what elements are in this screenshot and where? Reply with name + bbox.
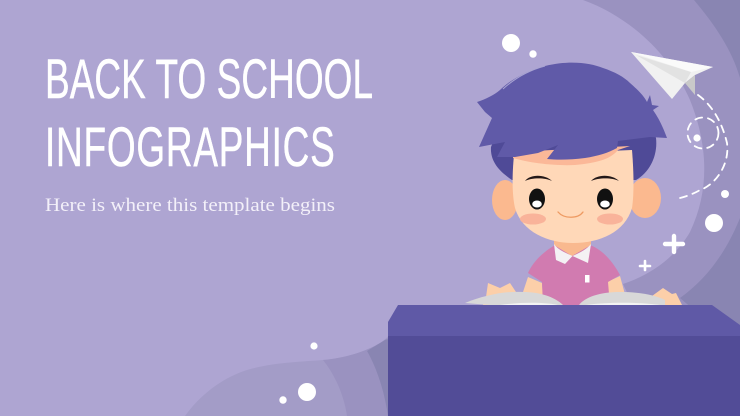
- title line 1: BACK TO SCHOOL: [45, 48, 373, 111]
- open book: [465, 292, 665, 305]
- forehead shadow: [513, 146, 630, 165]
- hair front: [477, 63, 667, 160]
- shirt: [528, 245, 620, 306]
- icon: paper plane: [631, 52, 713, 99]
- character: boy: [477, 63, 667, 306]
- top right darker band: [680, 0, 740, 345]
- eyebrows: [525, 176, 619, 181]
- cheeks: [520, 214, 623, 224]
- mouth: [558, 212, 583, 217]
- decorative dots: [279, 34, 729, 404]
- bottom darker band: [367, 330, 420, 416]
- desk front: [388, 336, 740, 416]
- collar: [554, 244, 591, 264]
- subtitle: Here is where this template begins: [45, 195, 335, 216]
- plane dashed trail: [680, 95, 727, 198]
- arms: [521, 276, 626, 298]
- eye right: [597, 188, 613, 210]
- title line 2: INFOGRAPHICS: [45, 116, 335, 179]
- neck: [554, 240, 591, 256]
- top right curved band: [583, 0, 740, 340]
- title: [45, 48, 373, 179]
- shirt pocket tag: [585, 275, 590, 282]
- hands: [483, 283, 682, 305]
- ears: [492, 178, 661, 220]
- bottom left wave band: [185, 316, 430, 416]
- face: [513, 150, 634, 243]
- bottom middle band: [323, 330, 400, 416]
- desk: [388, 305, 740, 416]
- icon: plus signs: [640, 236, 683, 270]
- desk top face: [388, 305, 740, 337]
- hair highlight: [503, 66, 545, 89]
- hair back: [491, 100, 656, 180]
- eye left: [529, 188, 545, 210]
